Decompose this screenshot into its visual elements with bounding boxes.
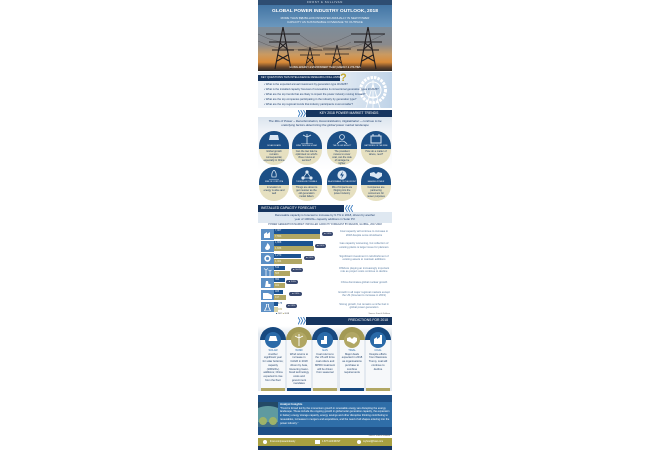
bar 2018 <box>274 259 302 264</box>
note: Growth in all major regional markets except the US (forecast to increase in 2019) <box>338 291 390 297</box>
trend 3 <box>327 131 357 165</box>
card text <box>366 333 390 388</box>
row: nuclear <box>261 278 388 288</box>
heading: predictions for 2018: PREDICTIONS FOR 2018 <box>348 318 388 322</box>
trend 4: BATTERIES ON THE RISE <box>365 144 387 146</box>
source note: Source: Frost & Sullivan <box>369 435 390 437</box>
card text: Despite efforts from Westview Trump, coal will continue to decline <box>369 353 387 371</box>
trend 3: THE TILLER EFFECT <box>333 144 351 146</box>
row: other: 180 <box>278 308 282 311</box>
bar 2018: 1,304 <box>275 260 281 263</box>
base bar <box>366 388 390 391</box>
trend 7 <box>327 167 357 201</box>
heading: key 2018 power market trends: KEY 2018 POWER MARKET TRENDS <box>320 111 378 115</box>
icon: coal plant <box>370 332 386 348</box>
bar 2018 <box>274 246 314 251</box>
growth pill: ▲ 2.8% <box>292 293 299 295</box>
panel: analyst insights <box>258 395 392 435</box>
arc <box>260 327 286 340</box>
base bar <box>287 388 311 391</box>
question bullet 2: ▪ What is the installed capacity forecast of renewables & conventional generation types till 2025? <box>264 88 379 90</box>
card text: GAS <box>322 349 328 352</box>
row: solar <box>261 290 390 300</box>
trend 5: RISE OF CORP. PPA <box>265 180 283 182</box>
trend 2: WIND THROWS SOLAR <box>296 144 317 146</box>
icon: turbines <box>261 266 274 276</box>
bar 2018: 1,836 <box>275 247 281 250</box>
chart title: POWER GENERATION MARKET: INSTALLED CAPACITY FORECAST BY REGION, GLOBAL, 2017-2018 <box>268 223 382 226</box>
trend 2: Can the two tide be optimised on wind's three moves at service? <box>296 150 317 162</box>
growth pill: ▲ 2.8% <box>288 281 296 283</box>
subtitle: CAPACITY AS SUSTAINABLE COVERAGE TO OUTPACE <box>287 20 363 24</box>
card text: COAL <box>374 349 382 352</box>
icon: flame <box>261 241 274 252</box>
forecast intro: Renewable capacity is forecast to increase by 9.7% in 2018, driven by another <box>275 213 375 217</box>
card text: Wind returns to increase in CAGR in 2018 driven by Asia, favouring lower-fossil technology costs and government mandates <box>289 353 309 385</box>
trend 1: Global growth remains consequential, especially in China <box>264 150 284 162</box>
panel: trend circles <box>259 131 391 201</box>
growth pill <box>291 268 303 272</box>
growth pill: ▲ 2.8% <box>324 232 331 234</box>
footer contacts: 1.877.GOFROST <box>322 440 340 443</box>
icon: flask <box>261 302 274 312</box>
bar 2017: 405 <box>275 290 279 293</box>
bar 2017: 1,270 <box>275 254 281 257</box>
card text <box>261 333 285 388</box>
bar 2018 <box>274 295 286 300</box>
growth pill: ▲ 2.8% <box>288 305 295 307</box>
row: other <box>261 302 389 312</box>
trends intro <box>258 117 392 170</box>
growth pill <box>315 244 326 248</box>
trend 6: Things are about to get messier as the old generation model falters <box>296 186 317 198</box>
footer contacts: myfrost@frost.com <box>363 440 383 443</box>
arc <box>286 327 312 340</box>
forecast intro <box>258 212 392 222</box>
bar 2018 <box>274 234 320 239</box>
legend: ■ 2017 ■ 2018 <box>276 312 289 314</box>
trend 5 <box>259 167 289 201</box>
trend 2 <box>292 131 322 165</box>
question bullet 3: ▪ What are the top trends that are likely to impact the power industry moving forward? <box>264 92 365 96</box>
brand bar <box>258 0 392 5</box>
bar 2017 <box>274 266 285 270</box>
question bullet 4: ▪ What are the top companies participating in the industry by generation type? <box>264 98 356 100</box>
icon: panel <box>261 290 274 300</box>
growth pill: ▲ 10.2% <box>293 269 301 271</box>
note: China dominates global nuclear growth <box>341 281 387 284</box>
question bullet 1: ▪ What is the expected annual investment by generation type till 2025? <box>264 82 348 86</box>
prediction: gas <box>312 327 338 391</box>
note: Coal capacity will continue to increase in 2018 despite some shutdowns <box>340 230 388 237</box>
trends intro: The 3Ds of Power – Decarbonization, Decentralization, Digitalization – continue to be underlying factors determining the global power market landscape <box>268 119 382 127</box>
key questions label <box>258 75 340 80</box>
growth pill <box>322 232 333 236</box>
photo caption: GLOBAL ENERGY & ENVIRONMENT TEAM | ENERGY & UTILITIES <box>289 67 361 69</box>
trend 4 <box>361 131 391 165</box>
title: GLOBAL POWER INDUSTRY OUTLOOK, 2018 <box>272 9 378 14</box>
key questions label: KEY QUESTIONS THIS INTELLIGENCE RESEARCH WILL ANSWER <box>261 76 345 79</box>
card text <box>313 333 337 388</box>
base bar <box>313 388 337 391</box>
header panel <box>258 0 392 28</box>
bar 2018 <box>274 307 278 312</box>
card text <box>340 333 364 388</box>
card text: Another significant year for solar bottoms; capacity (100GW+) additions; China expected to rise from the floor <box>263 353 283 382</box>
heading: key 2018 power market trends <box>306 110 392 117</box>
bar 2017 <box>274 241 313 246</box>
bar 2017: 1,868 <box>275 241 281 244</box>
bar 2017: 392 <box>275 278 279 281</box>
footer contacts <box>258 438 392 446</box>
trend 8: Companies are partnering consumers for newer purposes <box>367 186 385 198</box>
trend 8: HANDING POWER <box>368 180 384 182</box>
card text: Major deals expected in 2018 as organisations purchase to combine requirements <box>342 353 362 374</box>
growth pill <box>286 304 297 308</box>
arc <box>339 327 365 340</box>
note: Gas capacity worsening, but collection of existing plants is larger issue for planners <box>339 242 389 249</box>
trend 3: The president moves to cover coal, can the side of storage be tighter <box>332 150 352 165</box>
icon: question mark: ? <box>340 72 347 84</box>
bar 2018 <box>274 283 285 288</box>
icon: chevrons <box>298 110 306 117</box>
icon: plant <box>261 278 274 288</box>
bar 2017 <box>274 229 320 234</box>
subtitle <box>280 16 370 24</box>
bar 2017 <box>274 254 301 258</box>
icon: wind <box>291 332 307 348</box>
trend 1: SOLAR SOARS <box>267 144 281 146</box>
icon: chevrons left <box>345 205 353 212</box>
heading: installed capacity forecast: INSTALLED CAPACITY FORECAST <box>261 206 316 210</box>
photo: transmission towers at sunset <box>258 27 392 71</box>
bar 2017 <box>274 290 283 294</box>
prediction: tidal <box>339 327 365 391</box>
card text <box>287 333 311 388</box>
card text: Coal returns to the US will force coal orders and MPRC treatment will be driven from seasonal <box>315 353 335 374</box>
analyst text: Analyst Insights <box>280 402 302 406</box>
growth pill: ▲ 2.6% <box>306 257 313 259</box>
trend 1 <box>259 131 289 165</box>
icon: gear watermark <box>359 76 387 108</box>
icon: handshake <box>344 332 360 348</box>
question bullet 5: ▪ What are the top regional trends that industry participants must consider? <box>264 102 353 106</box>
bar 2017: 512 <box>275 266 279 269</box>
brand bar: FROST & SULLIVAN <box>307 0 343 4</box>
prediction: wind <box>286 327 312 391</box>
trend 8 <box>361 167 391 201</box>
bar 2018: 402 <box>275 284 279 287</box>
row: coal <box>261 229 388 240</box>
base bar <box>340 388 364 391</box>
prediction: solar <box>260 327 286 391</box>
arc <box>312 327 338 340</box>
trend 7: BLACKSWANS ON THE FRONT <box>328 180 356 182</box>
footer <box>258 438 392 450</box>
arc <box>365 327 391 340</box>
bar 2017: 7,907 <box>275 229 281 232</box>
trend 6 <box>292 167 322 201</box>
card text: SOLAR <box>268 349 278 352</box>
row: hydro <box>261 253 389 264</box>
row: wind <box>261 266 390 276</box>
heading: predictions for 2018 <box>306 317 392 324</box>
card text: TIDAL <box>348 349 356 352</box>
bar 2018 <box>274 271 290 276</box>
bar 2017 <box>274 302 278 306</box>
note: Offshore playing an increasingly important role as project costs continue to decline <box>339 267 389 273</box>
source: Source: Frost & Sullivan <box>369 312 390 314</box>
panel: key questions <box>258 72 392 108</box>
icon: factory <box>261 229 274 240</box>
bar 2018: 565 <box>275 272 279 275</box>
bar 2017 <box>274 278 285 282</box>
card text: WIND <box>295 349 303 352</box>
footer contacts: frost.com/powerindustry <box>270 440 295 443</box>
forecast intro: year of 100GW+ capacity additions in Solar PV. <box>295 217 355 221</box>
icon: gas <box>317 332 333 348</box>
base bar <box>261 388 285 391</box>
bar 2018: 417 <box>275 296 279 299</box>
bar 2018: 7,553 <box>275 235 281 238</box>
icon: chevrons right <box>298 317 306 325</box>
growth pill <box>289 292 302 296</box>
icon: analyst photo <box>258 402 278 427</box>
bar chart <box>261 229 390 314</box>
growth pill: ▲ 2.4% <box>317 245 324 247</box>
trend 4: How do a matter of where, next? <box>365 150 387 156</box>
icon: solar <box>265 332 281 348</box>
growth pill <box>304 256 315 260</box>
trend 5: Innovation in energy is alive and well <box>264 186 284 195</box>
trend 6: TURNING IN POSSIBLE <box>296 180 317 182</box>
row: gas <box>261 241 389 252</box>
inner band <box>258 402 392 427</box>
panel: predictions background <box>258 326 392 391</box>
prediction: coal <box>365 327 391 391</box>
heading: installed capacity forecast <box>258 205 344 212</box>
note: Strong growth, but remains a niche fuel in global power generation <box>339 303 389 309</box>
analyst text: "Trend is forced led by the momentum growth in renewable energy are disrupting the energy landscape. These include the ongoing growth in global solar generation capacity, the expansion in battery energy storage capacity, energy savings and other disruptive thinking contributing to renewables, increases in mergers and acquisitions, and the need of all shapes entering into the power industry." <box>280 407 390 425</box>
subtitle: MORE THAN $$$ BILLION INVESTED ANNUALLY IN NEW POWER <box>281 16 369 20</box>
note: Significant investment in refurbishment of existing assets to maintain additions <box>339 255 389 261</box>
row: other: 175 <box>278 302 282 305</box>
icon: gear <box>261 253 274 264</box>
trend 7: Mix of impacts are flinging into the power industry <box>332 186 352 195</box>
growth pill <box>286 280 298 284</box>
